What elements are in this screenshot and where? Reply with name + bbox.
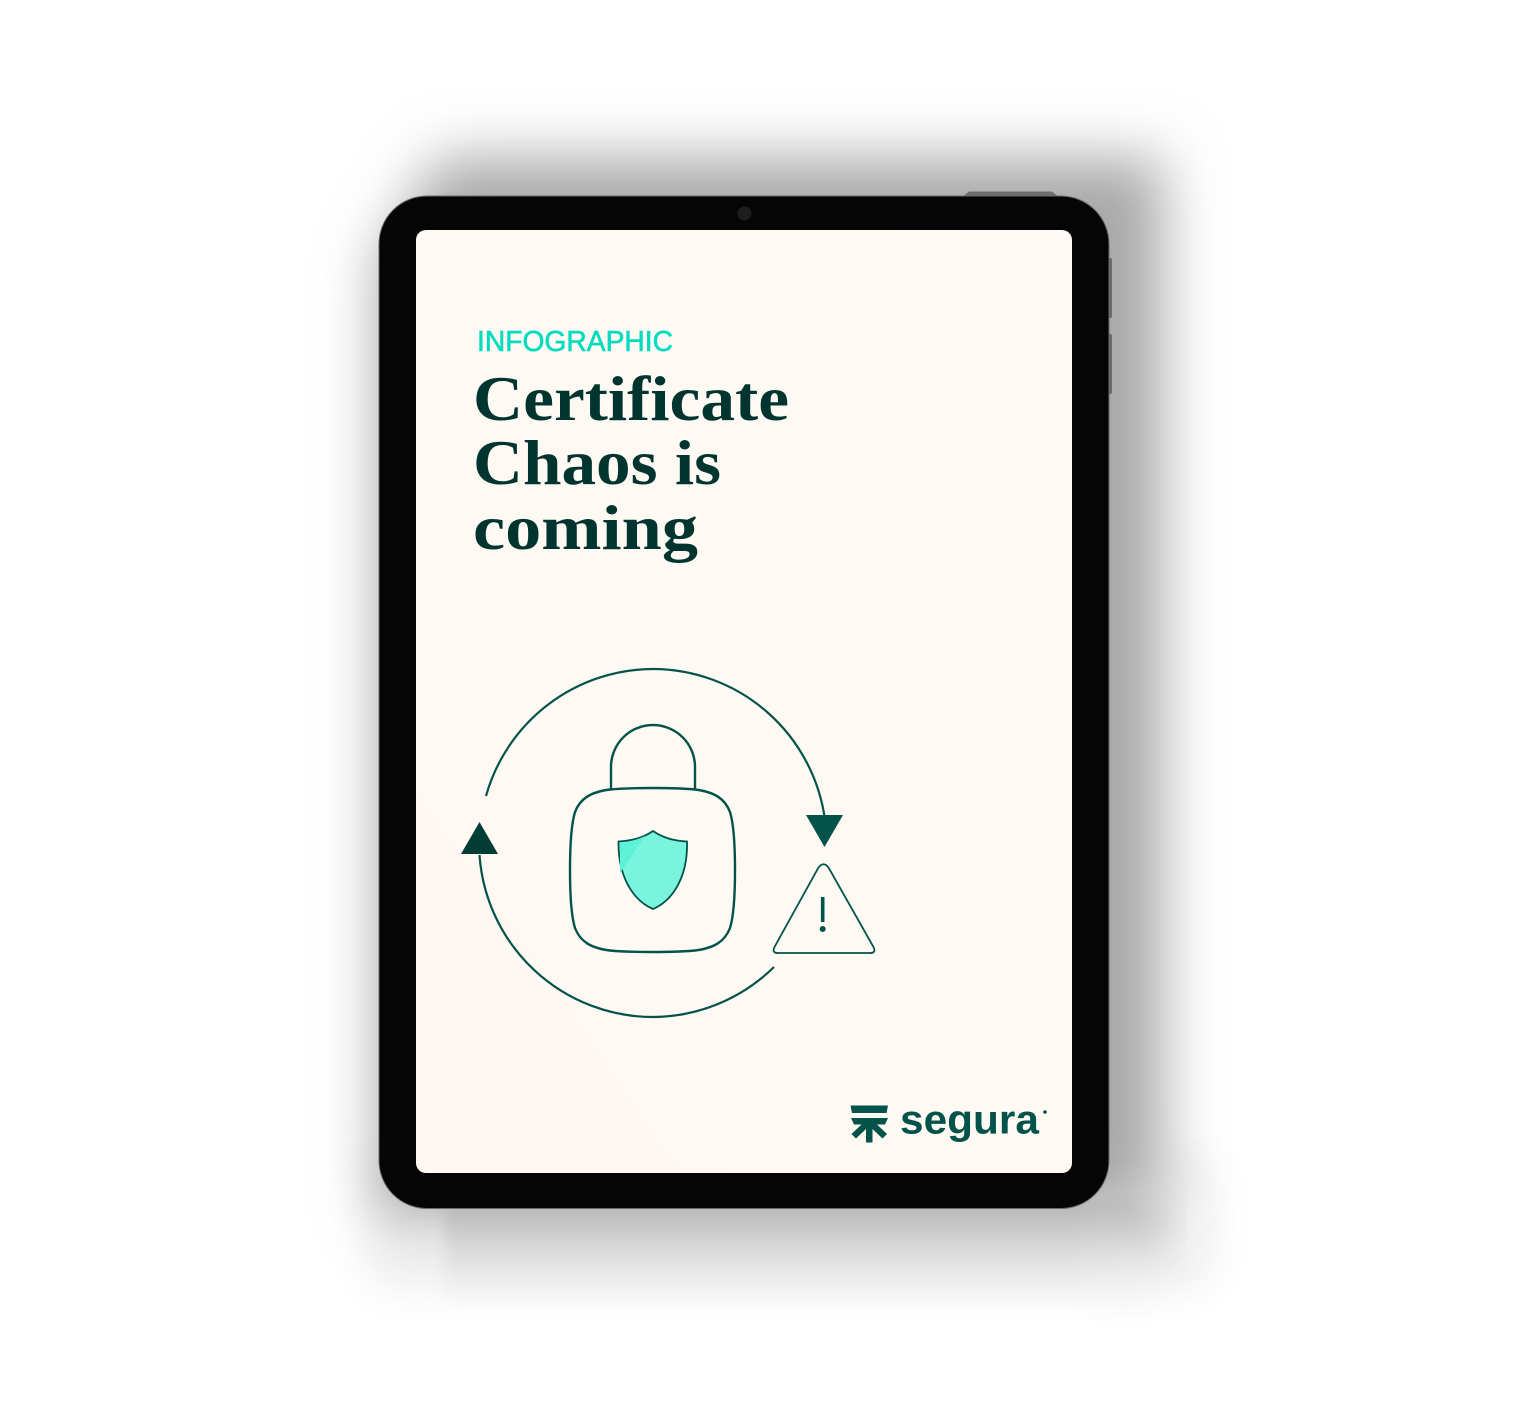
eyebrow label: INFOGRAPHIC — [477, 326, 673, 358]
registered mark — [1043, 1110, 1047, 1114]
title: Chaos is — [473, 427, 721, 498]
segura logo — [850, 1096, 1047, 1142]
title: Certificate — [473, 363, 789, 434]
front camera — [738, 206, 752, 220]
warning triangle — [774, 864, 874, 953]
side volume buttons — [1107, 258, 1112, 394]
shield — [618, 831, 687, 909]
title: coming — [473, 492, 698, 563]
title — [473, 363, 789, 563]
arrowhead: down — [806, 815, 843, 847]
illustration: lock in renewal cycle with warning — [461, 669, 874, 1017]
wordmark: segura — [900, 1096, 1040, 1142]
cycle arrow: bottom arc — [480, 855, 774, 1017]
tablet device — [379, 192, 1112, 1208]
arrowhead: up — [461, 822, 498, 854]
logo icon — [850, 1106, 888, 1142]
padlock shackle — [611, 725, 695, 789]
tablet body — [379, 196, 1109, 1208]
top power button — [962, 192, 1059, 197]
device drop shadow — [365, 158, 1215, 1313]
exclamation mark — [821, 897, 825, 922]
padlock body — [570, 788, 735, 952]
screen — [416, 230, 1072, 1173]
cycle arrow: top arc — [486, 669, 825, 820]
